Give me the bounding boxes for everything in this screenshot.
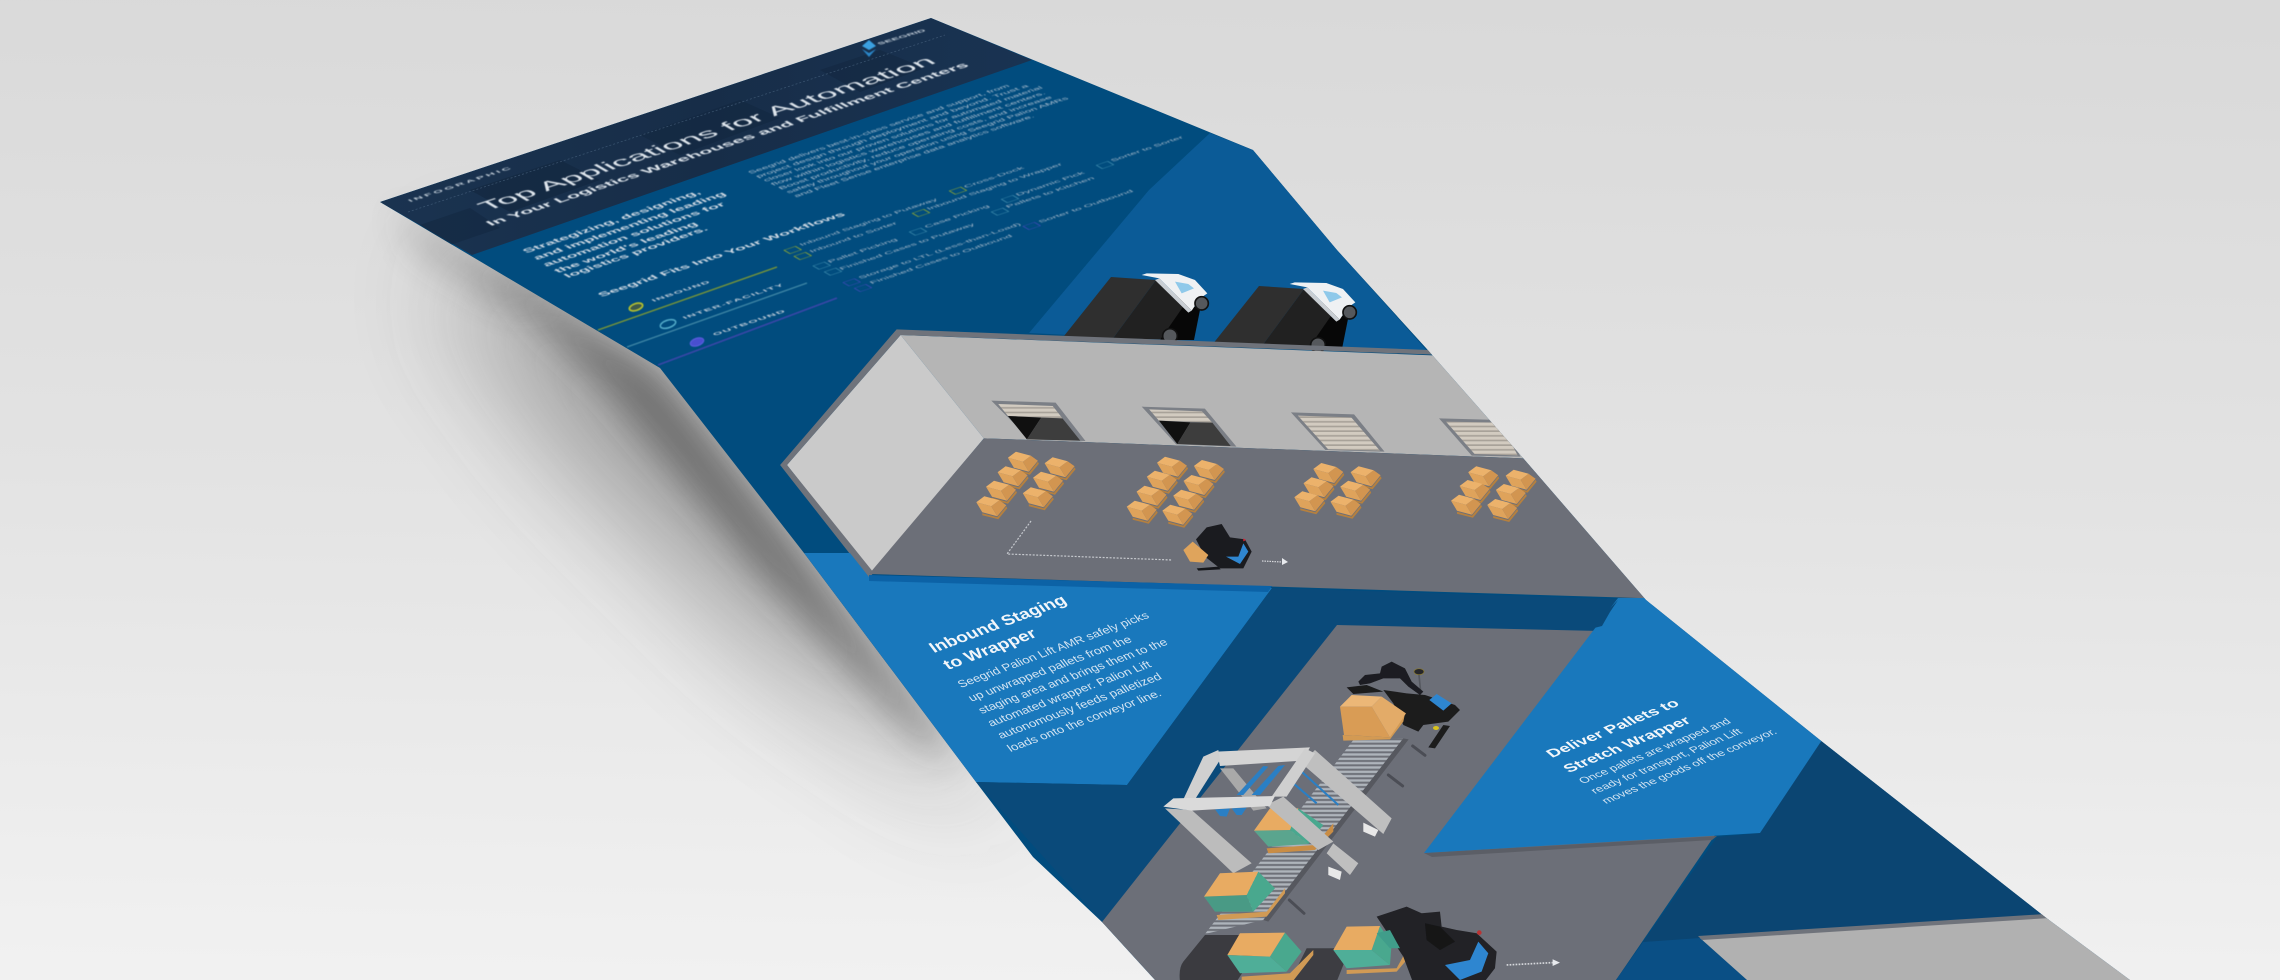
folded infographic sheet [370,10,2150,980]
callout 2 heading: Stretch Wrapper [1560,715,1695,775]
rear leg [1428,725,1450,748]
shadow under the folded paper [395,210,1000,825]
description paragraph: safety throughout your operation using Seegrid Palion AMRs [784,96,1071,194]
callout 1 heading: Inbound Staging [925,592,1070,656]
inbound workflow items: Cross-Dock [962,166,1026,189]
conveyor floor panel [1102,625,1715,980]
inbound workflow items: Inbound to Sorter [808,221,899,254]
inter-facility workflow items: Pallet Picking [826,238,900,264]
bold statement: Strategizing, designing, [520,189,704,254]
wrapped pallet lower [1204,872,1285,920]
bold statement [520,189,729,279]
label: inbound: INBOUND [650,280,713,303]
workflow lists [784,135,1186,292]
infographic tag: INFOGRAPHIC [406,166,516,203]
outbound workflow items: Storage to LTL (Less-than-Load) [857,222,1023,280]
callout 1 body [955,609,1171,754]
load top [1340,695,1382,707]
floor shadow strip [869,575,1272,592]
outbound workflow items [843,189,1135,292]
inter-facility workflow items: Finished Cases to Putaway [838,222,977,271]
lower right dark facet [1616,740,2050,980]
load front [1340,707,1390,737]
description paragraph: Boost productivity, reduce operating costs, and increase [777,95,1055,190]
warehouse wall and floor [780,329,1647,598]
workflow categories [598,267,837,365]
callout 2 body: ready for transport, Palion Lift [1588,726,1745,796]
dotted AMR path [1007,521,1172,560]
mast arm [1358,662,1423,695]
subtitle: In Your Logistics Warehouses and Fulfillment Centers [483,61,972,227]
arrow after forklift 2 [1507,959,1560,966]
sheet base colour [370,10,2150,980]
drive body [1383,690,1460,732]
truck 1 [1064,273,1208,343]
intro text blocks [520,84,1071,298]
pallet under load [1343,713,1405,741]
arrow after small forklift [1262,558,1288,565]
conveyor line and machinery [1163,738,1560,980]
box cluster 4 [1451,466,1537,522]
truck 2 [1212,282,1356,352]
callout 1 text [925,592,1171,754]
bold statement: and implementing leading [530,191,729,261]
left wall [787,335,984,573]
warehouse floor [869,438,1647,598]
bold statement: the world's leading [552,221,701,274]
conveyor side rail [1263,738,1409,922]
inter-facility workflow items [813,135,1186,275]
dock door 2 open [1142,407,1236,447]
workflows heading: Seegrid Fits Into Your Workflows [595,211,848,298]
wrapped pallet in frame [1254,808,1333,853]
callout 2 heading: Deliver Pallets to [1543,697,1683,760]
callout 2 shadow [1424,836,1717,857]
blue battery panel [1429,694,1452,711]
callout 2 body: moves the goods off the conveyor. [1599,726,1780,806]
inbound workflow items: Inbound Staging to Putaway [798,198,940,247]
next section wall [1700,917,2135,980]
dock door 3 closed [1291,412,1385,452]
description paragraph: Seegrid delivers best-in-class service and support, from [746,84,1012,175]
callout 2 body: Once pallets are wrapped and [1576,716,1734,786]
callout 1 body: autonomously feeds palletized [995,670,1164,741]
callout 2 heading [1543,697,1695,775]
callout 1 body: Seegrid Palion Lift AMR safely picks [955,609,1152,690]
wrapped pallet bottom [1227,933,1313,980]
dark belt [1180,935,1267,980]
small forklift with box [1183,524,1252,571]
yellow lamp [1433,726,1439,730]
inter-facility workflow items: Pallets to Kitchen [1004,176,1097,209]
wrapped pallet on forklift 2 [1333,926,1407,974]
dark blue notch above callout 2 [1596,600,1618,628]
outbound workflow items: Sorter to Outbound [1037,189,1135,224]
callout panel 1 background [804,553,1272,785]
inter-facility workflow items: Sorter to Sorter [1109,135,1186,163]
description paragraph: and Fleet Sense enterprise data analytics software. [792,114,1036,198]
icon: inbound [628,302,644,312]
tiller and wheel [1414,669,1424,692]
bold statement: logistics providers. [562,226,711,279]
seegrid logo: SEEGRID [876,28,928,46]
back wall [901,335,1523,458]
category rule: inbound [598,267,777,330]
next section wall frame [1698,914,2050,940]
description paragraph: flow within logistics warehouses and fulfillment centers. [769,91,1048,187]
label: outbound: OUTBOUND [711,309,788,337]
callout 2 text [1543,697,1780,806]
description paragraph [746,84,1071,198]
box cluster 2 [1127,457,1225,528]
icon: outbound [689,336,705,348]
outbound workflow items: Finished Cases to Outbound [868,234,1015,285]
forklift 1 with load [1340,662,1460,748]
conveyor legs [1289,746,1425,913]
callout 1 body: up unwrapped pallets from the [965,633,1135,704]
dark belt right [1290,948,1350,980]
lighter blue background facet behind trucks [1029,133,1429,353]
seegrid logo [862,28,928,57]
inbound workflow items: Inbound Staging to Wrapper [925,162,1065,211]
roller conveyor [1205,738,1403,934]
icon: inter-facility [659,318,677,330]
box cluster 3 [1294,463,1382,519]
dock door 1 open [991,401,1085,441]
forklift 2 [1377,907,1497,980]
inter-facility workflow items: Case Picking [923,204,992,229]
category rule: outbound [658,298,837,365]
callout panel 2 background [1424,598,1822,853]
bold statement: automation solutions for [540,201,728,268]
callout 1 body: automated wrapper. Palion Lift [985,658,1155,729]
inbound workflow items [784,162,1065,260]
callout 1 body: loads onto the conveyor line. [1004,687,1164,754]
load side [1372,697,1406,737]
dark blue facet under first floor [976,588,1650,922]
title: Top Applications for Automation [472,54,941,213]
inter-facility workflow items: Dynamic Pick [1014,171,1087,197]
description paragraph: closer look into our proven solutions for automated material [761,85,1045,183]
callout 1 body: staging area and brings them to the [975,636,1171,716]
stretch wrapper frame [1163,747,1392,880]
label: inter-facility: INTER-FACILITY [681,283,787,320]
header band [380,18,1032,255]
callout 1 heading: to Wrapper [939,625,1041,673]
description paragraph: project design through deployment and beyond. Trust a [754,84,1031,179]
wall top frame [780,329,1434,578]
lower corner facet [1616,938,1747,980]
box cluster 1 [976,452,1076,519]
header text [406,28,972,227]
category rule: inter-facility [627,283,807,347]
forks [1347,685,1383,694]
dock door 4 closed [1439,418,1521,457]
